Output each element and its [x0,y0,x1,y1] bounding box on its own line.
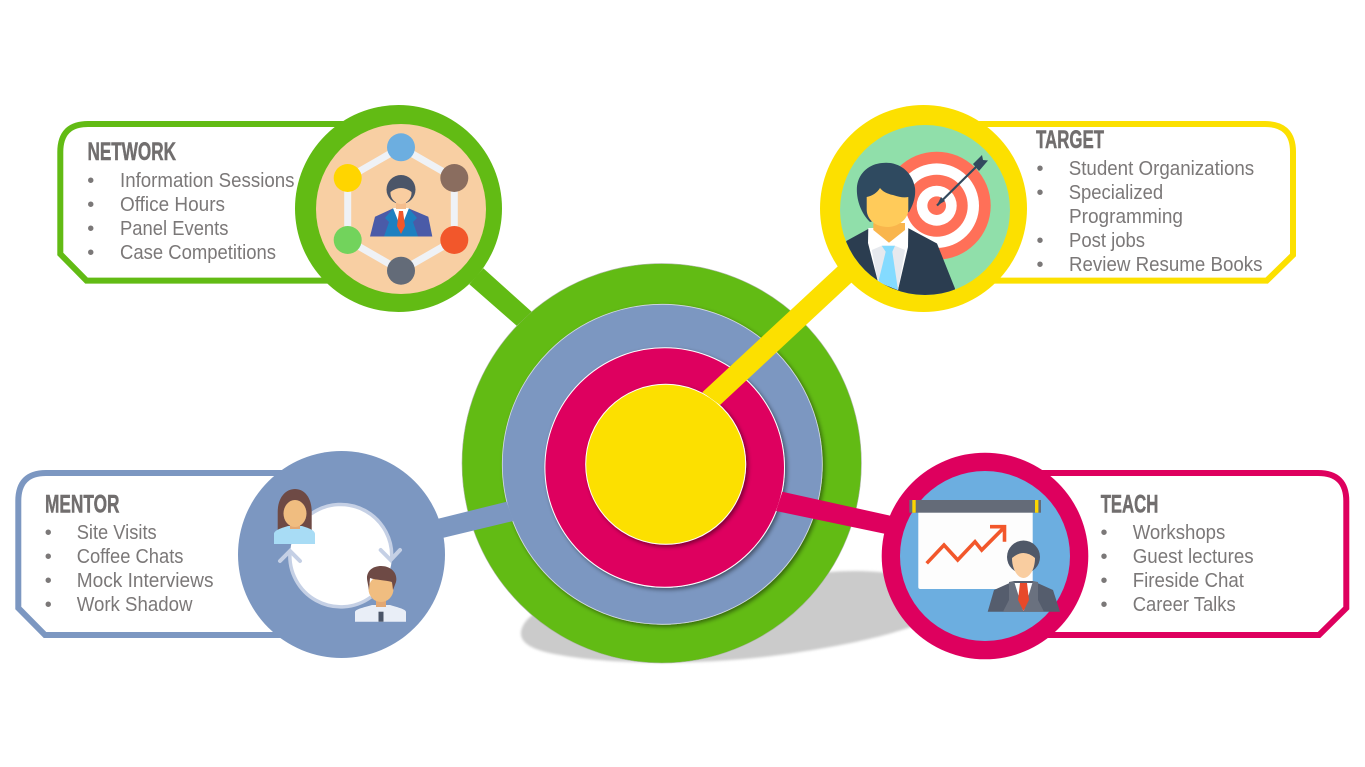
mentor white centre [290,504,392,606]
ring: green [462,264,861,663]
teach list: • [1100,546,1108,568]
presentation board [918,511,1033,589]
female mentor [274,489,315,544]
mentor list [45,522,213,616]
teach list: Workshops [1133,522,1225,544]
network list: • [87,218,94,240]
network list [87,170,294,264]
icon: network [295,105,502,312]
ring: yellow [586,384,746,544]
mentor list: • [45,522,52,544]
bullseye [883,152,991,260]
panel: network [60,124,400,281]
mentor list: • [45,546,52,568]
connector: mentor [425,502,513,541]
cycle arrowhead: right [381,550,400,560]
teach heading: TEACH [1101,491,1158,519]
panel: mentor [18,473,340,635]
target list: Review Resume Books [1069,254,1262,276]
target list [1036,158,1262,276]
teach panel outline [985,473,1346,635]
arrow in bullseye [937,155,988,206]
cycle arc: top right [311,504,392,560]
mentor list: Mock Interviews [77,570,214,592]
rising chart line [927,527,1004,563]
mentor panel outline [18,473,340,635]
concentric target rings [462,264,861,663]
teach list: • [1100,570,1108,592]
mentor list: Coffee Chats [77,546,184,568]
teach list [1100,522,1254,616]
network nodes [334,133,468,285]
target list: Specialized [1069,182,1163,204]
network list: • [87,194,94,216]
board top bar [909,500,1041,513]
mentor list: Site Visits [77,522,157,544]
network list: Information Sessions [120,170,294,192]
teach list: Fireside Chat [1133,570,1244,592]
network panel outline [60,124,400,281]
teach list: Career Talks [1133,594,1236,616]
teach list: • [1100,522,1108,544]
mentor disc [238,451,445,658]
target ring [820,105,1027,312]
mentor heading: MENTOR [45,491,120,519]
target list: Student Organizations [1069,158,1254,180]
ground shadow [521,571,950,663]
cycle arrowhead: left [280,551,300,561]
mentor list: • [45,570,52,592]
network list: Case Competitions [120,242,276,264]
target person [846,162,955,295]
teach list: Guest lectures [1133,546,1254,568]
network list: • [87,242,94,264]
target list: • [1036,158,1044,180]
icon: teach [882,453,1088,659]
icon: mentor [238,451,445,658]
network list: Panel Events [120,218,228,240]
network disc [316,124,486,294]
teach disc [900,471,1070,641]
connector: network [469,268,532,326]
target disc [840,125,1010,295]
target list: • [1036,254,1044,276]
teach list: • [1100,594,1108,616]
panel: teach [985,473,1346,635]
target list: • [1036,230,1044,252]
network hexagon links [348,147,454,271]
network list: • [87,170,94,192]
target list: • [1036,182,1044,204]
target heading: TARGET [1036,126,1104,154]
teach person [988,540,1060,612]
network person [370,175,432,236]
cycle arc: bottom left [290,552,371,607]
mentor list: • [45,594,52,616]
network heading: NETWORK [88,138,176,166]
connector: teach [776,492,905,537]
target panel outline [925,124,1293,281]
male mentee [355,566,406,622]
teach ring [882,453,1088,659]
icon: target [820,105,1027,312]
target list: Post jobs [1069,230,1145,252]
ring: blue [502,304,822,624]
network list: Office Hours [120,194,225,216]
connector: target [702,255,865,405]
network ring [295,105,502,312]
ring: crimson [545,348,784,587]
mentor list: Work Shadow [77,594,193,616]
panel: target [925,124,1293,281]
target list: Programming [1069,206,1183,228]
